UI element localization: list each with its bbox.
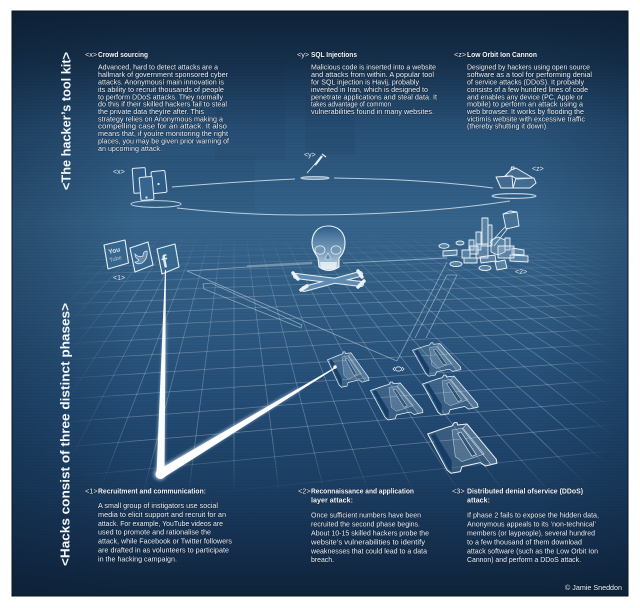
text block: crowd sourcing: Crowd sourcing <box>98 50 148 59</box>
icon: facebook tile: f <box>160 251 171 272</box>
text block: distributed denial of service: Distributed denial ofservice (DDoS) <box>467 486 583 496</box>
text block: reconnaissance: website’s vulnerabilities to identify <box>310 537 425 546</box>
faint attack route lines <box>187 258 457 361</box>
icon: youtube tile: You <box>108 246 121 256</box>
icon: youtube tile: Tube <box>109 255 122 264</box>
text block: reconnaissance <box>298 486 429 564</box>
text block: low orbit ion cannon: victimís website with excessive traffic <box>467 114 585 123</box>
text block: recruitment and communication: in the hacking campaign. <box>98 554 177 563</box>
text block: distributed denial of service: Anonymous appeals to its ‘non-technical’ <box>467 520 596 529</box>
text block: sql injections: takes advantage of common <box>311 100 391 109</box>
text block: distributed denial of service: to a few thousand of them download <box>467 537 582 546</box>
text block: crowd sourcing: do this if their skilled hackers fail to steal <box>98 100 227 109</box>
text block: sql injections: for SQL injection is Havij, probably <box>311 78 419 87</box>
text block: low orbit ion cannon: mobile) to perform an attack using a <box>467 100 584 109</box>
label: y: <y> <box>304 152 316 159</box>
text block: crowd sourcing <box>85 50 230 153</box>
credit: © Jamie Sneddon <box>565 583 622 592</box>
text block: crowd sourcing: places, you may be given prior warning of <box>98 137 230 146</box>
label: z: <z> <box>532 166 544 173</box>
text block: reconnaissance: <2> <box>298 486 311 496</box>
text block: recruitment and communication: used to promote and rationalise the <box>98 528 211 537</box>
text block: sql injections: and attacks from within. A popular tool <box>311 70 434 79</box>
text block: low orbit ion cannon: (thereby shutting it down). <box>467 122 548 131</box>
text block: sql injections: vulnerabilities found in many websites. <box>311 107 434 116</box>
text block: low orbit ion cannon: software as a tool for performing denial <box>467 70 592 79</box>
label: 2: <2> <box>515 269 527 276</box>
icon: youtube tile <box>104 240 128 269</box>
text block: reconnaissance: layer attack: <box>311 496 353 504</box>
text block: sql injections: penetrate applications and steal data. It <box>311 92 437 101</box>
text block: crowd sourcing: Advanced, hard to detect attacks are a <box>98 63 219 72</box>
text block: reconnaissance: weaknesses that could lead to a data <box>310 546 428 555</box>
icon: facebook tile <box>157 244 179 274</box>
perspective floor grid <box>75 238 606 488</box>
text block: recruitment and communication <box>85 486 232 563</box>
text block: crowd sourcing: means that, if youíre monitoring the right <box>98 129 228 138</box>
text block: recruitment and communication: media to elicit support and recruit for an <box>98 510 226 519</box>
text block: sql injections: invented in Iran, which is designed to <box>311 85 428 94</box>
text block: distributed denial of service: attack: <box>467 496 490 504</box>
text block: crowd sourcing: an upcoming attack. <box>98 144 162 153</box>
icon: syringe <box>307 154 326 173</box>
text block: distributed denial of service: Cannon) and perform a DDoS attack. <box>467 555 581 564</box>
text block: crowd sourcing: <x> <box>85 50 97 59</box>
icon: target server cityscape <box>439 211 528 271</box>
text block: reconnaissance: Reconnaissance and application <box>311 486 414 496</box>
text block: reconnaissance: recruited the second phase begins. <box>311 520 420 529</box>
text block: recruitment and communication: attack. For example, YouTube videos are <box>98 519 223 528</box>
text block: recruitment and communication: attack, while Facebook or Twitter followers <box>98 537 232 546</box>
text block: low orbit ion cannon: <z> <box>454 50 466 59</box>
text block: reconnaissance: Once sufficient numbers have been <box>311 511 421 520</box>
text block: reconnaissance: breach. <box>311 555 334 564</box>
tanks: ddos attackers <box>327 343 497 473</box>
title: the hacker's tool kit: <The hacker’s tool kit> <box>60 52 74 190</box>
text block: recruitment and communication: are drafted in as volunteers to participate <box>98 545 229 554</box>
crossbones <box>293 271 364 290</box>
text block: crowd sourcing: the private data theyíre after. This <box>98 107 204 116</box>
skull and crossbones <box>293 226 364 290</box>
text block: low orbit ion cannon: Designed by hackers using open source <box>467 63 590 72</box>
text block: low orbit ion cannon: consists of a few hundred lines of code <box>467 85 588 94</box>
label: 1: <1> <box>113 275 125 282</box>
text block: sql injections <box>297 50 437 116</box>
text block: sql injections: <y> <box>297 50 309 59</box>
text block: crowd sourcing: its ability to recruit thousands of people <box>98 85 224 94</box>
text block: distributed denial of service: If phase 2 fails to expose the hidden data, <box>467 511 599 520</box>
text block: low orbit ion cannon: web browser. It works by flooding the <box>466 107 584 116</box>
tool kit orbit ring <box>131 177 536 215</box>
text block: crowd sourcing: compelling case for an attack. It also <box>98 122 227 131</box>
icon: twitter tile <box>130 242 153 272</box>
text block: low orbit ion cannon <box>454 50 592 131</box>
text block: sql injections: Malicious code is inserted into a website <box>311 63 436 72</box>
text block: distributed denial of service <box>452 486 599 564</box>
text block: low orbit ion cannon: of service attacks (DDoS). It probably <box>467 78 584 87</box>
text block: recruitment and communication: A small group of instigators use social <box>98 501 218 510</box>
text block: sql injections: SQL Injections <box>311 50 357 59</box>
text block: crowd sourcing: attacks. Anonymousí main innovation is <box>98 78 224 87</box>
text block: reconnaissance: About 10-15 skilled hackers probe the <box>311 528 429 537</box>
text block: low orbit ion cannon: and enables any device (PC, Apple or <box>467 92 584 101</box>
text block: recruitment and communication: <1> <box>85 486 98 496</box>
glowing attack beam <box>154 270 337 480</box>
skull <box>312 226 345 270</box>
label: x: <x> <box>113 169 125 176</box>
text block: low orbit ion cannon: Low Orbit Ion Cannon <box>467 50 537 59</box>
icon: mobile devices <box>132 168 167 200</box>
text block: recruitment and communication: Recruitment and communication: <box>98 486 206 496</box>
text block: distributed denial of service: <3> <box>452 486 465 496</box>
title: hacks consist of three phases: <Hacks consist of three distinct phases> <box>58 303 72 566</box>
text block: distributed denial of service: attack software (such as the Low Orbit Ion <box>467 546 598 555</box>
label: 3 <box>393 367 404 371</box>
text block: distributed denial of service: members (or laypeople), several hundred <box>467 528 595 537</box>
text block: crowd sourcing: hallmark of government sponsored cyber <box>98 70 229 79</box>
icon: ion cannon tank <box>496 167 536 188</box>
text block: crowd sourcing: to perform DDoS attacks. They normally <box>98 92 223 101</box>
text block: crowd sourcing: strategy relies on Anonymous making a <box>98 114 224 123</box>
